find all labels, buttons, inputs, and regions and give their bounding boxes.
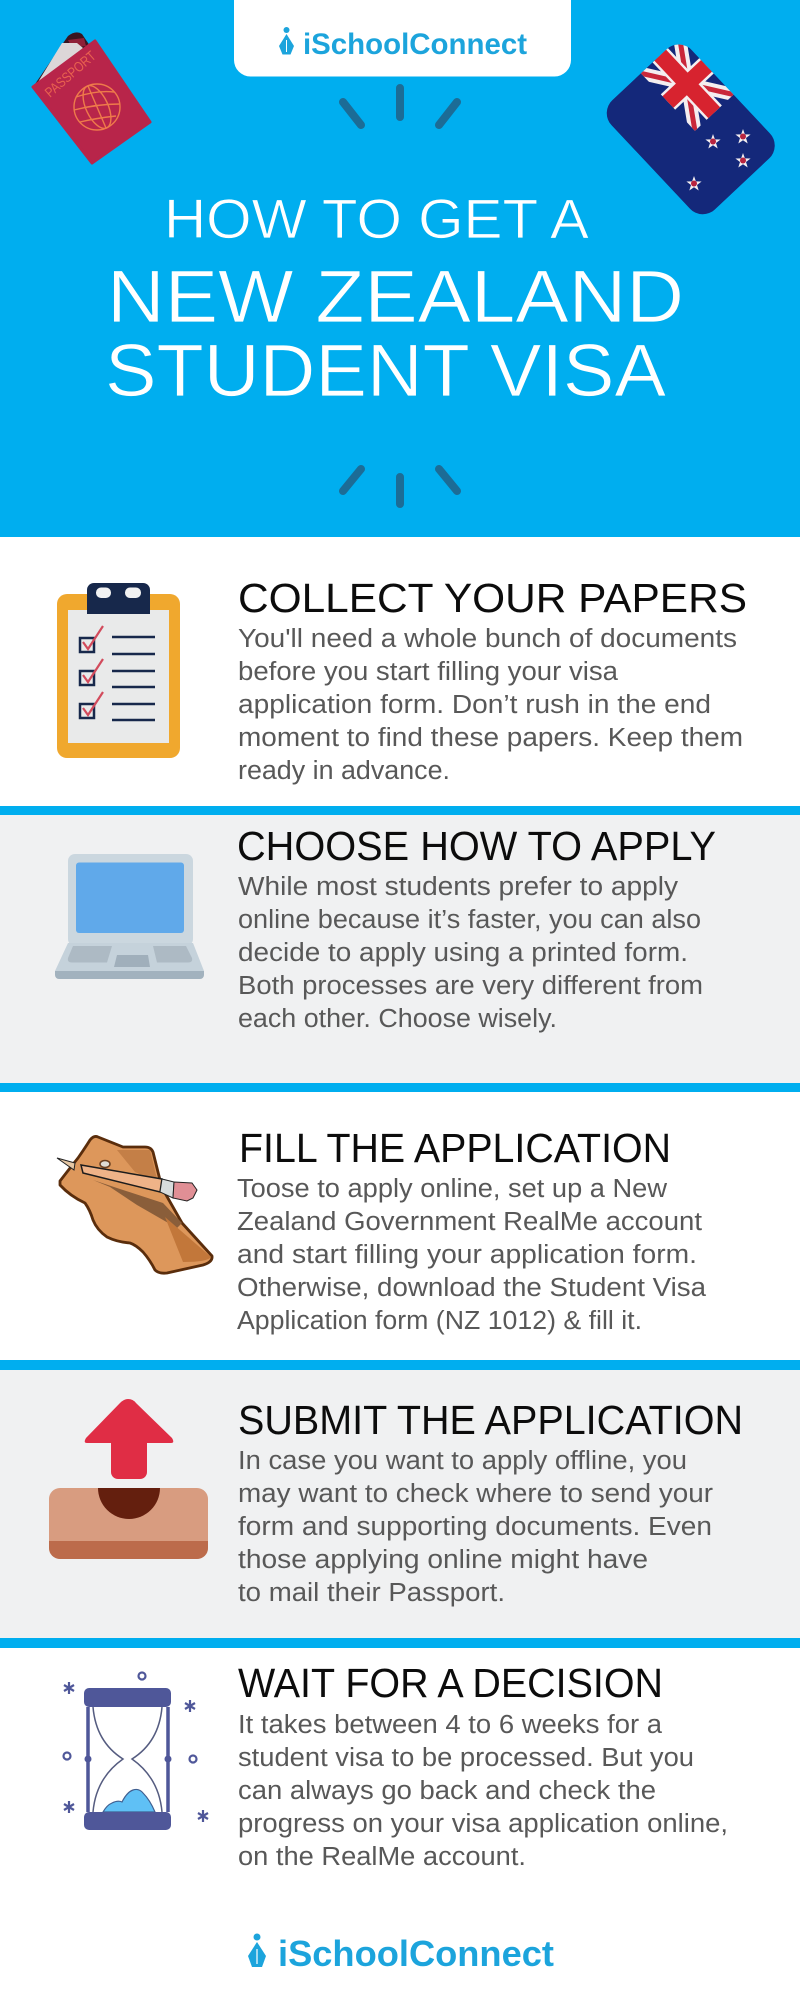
title: [105, 187, 684, 412]
icon: hourglass: [64, 1672, 208, 1830]
text: fill the application body: Zealand Government RealMe account: [237, 1208, 702, 1236]
icon: hand holding pencil: [57, 1136, 212, 1273]
text: collect your papers body: moment to find these papers. Keep them: [238, 724, 743, 752]
logo tab: iSchoolConnect: [234, 0, 571, 76]
text: submit the application body: [238, 1447, 714, 1607]
text: collect your papers body: [238, 625, 743, 785]
text: choose how to apply body: While most students prefer to apply: [238, 873, 678, 901]
text: submit the application body: In case you want to apply offline, you: [238, 1447, 687, 1475]
icon: New Zealand flag: [606, 44, 775, 214]
text: wait for a decision body: It takes between 4 to 6 weeks for a: [238, 1711, 663, 1739]
text: choose how to apply body: each other. Choose wisely.: [238, 1005, 557, 1033]
heading: fill the application: FILL THE APPLICATION: [239, 1125, 671, 1171]
divider bar 1: [0, 806, 800, 815]
text: submit the application body: form and supporting documents. Even: [238, 1513, 712, 1541]
panel: hero header: [0, 0, 800, 537]
text: fill the application body: and start filling your application form.: [237, 1241, 697, 1269]
title: STUDENT VISA: [105, 329, 667, 412]
text: wait for a decision body: can always go back and check the: [238, 1777, 656, 1805]
text: choose how to apply body: Both processes are very different from: [238, 972, 703, 1000]
divider bar 3: [0, 1360, 800, 1370]
text: collect your papers body: before you start filling your visa: [238, 658, 619, 686]
title: NEW ZEALAND: [107, 255, 684, 338]
icon: passport: PASSPORT: [41, 47, 99, 100]
icon: clipboard checklist: [57, 583, 180, 758]
text: submit the application body: those applying online might have: [238, 1546, 648, 1574]
icon: top spark lines: [343, 88, 457, 125]
text: wait for a decision body: student visa to be processed. But you: [238, 1744, 694, 1772]
panel: wait for a decision: [0, 1648, 800, 2000]
text: fill the application body: Application form (NZ 1012) & fill it.: [237, 1307, 642, 1335]
heading: collect your papers: COLLECT YOUR PAPERS: [238, 575, 747, 621]
footer logo: iSchoolConnect: iSchoolConnect: [278, 1933, 554, 1974]
divider bar 2: [0, 1083, 800, 1092]
heading: wait for a decision: WAIT FOR A DECISION: [238, 1660, 663, 1706]
text: wait for a decision body: progress on your visa application online,: [238, 1810, 728, 1838]
icon: passport: [33, 32, 150, 163]
text: collect your papers body: You'll need a whole bunch of documents: [238, 625, 737, 653]
text: choose how to apply body: [238, 873, 703, 1033]
text: wait for a decision body: [238, 1711, 728, 1871]
text: fill the application body: [237, 1175, 707, 1335]
text: wait for a decision body: on the RealMe account.: [238, 1843, 526, 1871]
heading: submit the application: SUBMIT THE APPLICATION: [238, 1397, 743, 1443]
divider bar 4: [0, 1638, 800, 1648]
icon: bottom spark lines: [343, 469, 457, 504]
panel: collect your papers: [0, 537, 800, 806]
heading: choose how to apply: CHOOSE HOW TO APPLY: [237, 823, 716, 869]
text: fill the application body: Otherwise, download the Student Visa: [237, 1274, 707, 1302]
icon: flag stars: [686, 129, 751, 190]
text: collect your papers body: application form. Don’t rush in the end: [238, 691, 711, 719]
icon: upload arrow and tray: [49, 1399, 208, 1559]
title: HOW TO GET A: [164, 187, 590, 250]
panel: submit the application: [0, 1370, 800, 1638]
text: submit the application body: to mail their Passport.: [238, 1579, 505, 1607]
panel: fill the application: [0, 1092, 800, 1360]
text: fill the application body: Toose to apply online, set up a New: [237, 1175, 668, 1203]
panel: choose how to apply: [0, 815, 800, 1083]
text: collect your papers body: ready in advance.: [238, 757, 450, 785]
text: submit the application body: may want to check where to send your: [238, 1480, 714, 1508]
text: choose how to apply body: decide to apply using a printed form.: [238, 939, 688, 967]
text: choose how to apply body: online because it’s faster, you can also: [238, 906, 701, 934]
logo tab: iSchoolConnect: iSchoolConnect: [303, 28, 527, 61]
icon: laptop: [55, 854, 204, 979]
